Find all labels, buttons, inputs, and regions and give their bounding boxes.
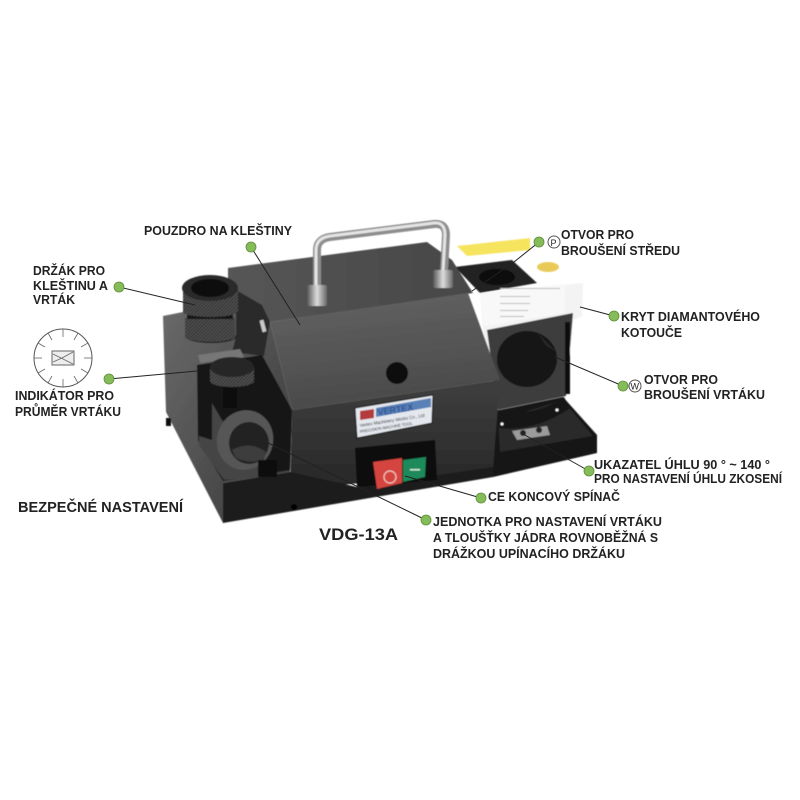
label: collet and drill holder: DRŽÁK PRO <box>33 263 105 278</box>
knob shadow <box>232 290 270 356</box>
label: collet and drill holder: VRTÁK <box>33 292 75 307</box>
leader lines <box>109 242 623 520</box>
left block <box>163 303 292 523</box>
indicator dial <box>34 329 92 387</box>
wheel dial <box>497 331 557 387</box>
label: diameter indicator: INDIKÁTOR PRO <box>15 388 114 403</box>
label: centre hole <box>561 228 680 258</box>
reference sheet <box>480 284 565 326</box>
icon: W marker: W <box>630 382 640 392</box>
label: angle pointer: PRO NASTAVENÍ ÚHLU ZKOSENÍ <box>594 471 782 486</box>
brand plate: PRECISION MACHINE TOOL <box>359 421 414 434</box>
angle pointer plate <box>512 426 550 440</box>
label: drill setting unit: A TLOUŠŤKY JÁDRA ROVNOBĚŽNÁ S <box>433 530 658 545</box>
icon: P marker: P <box>550 238 557 248</box>
brand plate: VERTEX <box>377 402 414 417</box>
label: collet and drill holder <box>33 263 108 307</box>
angle scale <box>497 397 570 429</box>
label: angle pointer: UKAZATEL ÚHLU 90 ° ~ 140 ° <box>594 457 770 472</box>
warning label <box>457 238 530 256</box>
right base plate <box>490 397 597 477</box>
centre grinding block <box>455 260 537 293</box>
label: diamond wheel cover <box>621 309 760 340</box>
handle <box>307 223 453 306</box>
label: CE limit switch: CE KONCOVÝ SPÍNAČ <box>488 489 620 504</box>
label: drill setting unit: DRÁŽKOU UPÍNACÍHO DRŽÁKU <box>433 546 625 561</box>
label: diamond wheel cover: KOTOUČE <box>621 325 682 340</box>
cover knob <box>386 362 408 384</box>
switch <box>355 440 437 489</box>
small yellow label <box>537 262 559 272</box>
cover top <box>228 242 473 322</box>
label: collet case: POUZDRO NA KLEŠTINY <box>144 223 293 238</box>
feet and screws <box>166 418 171 426</box>
wheel window <box>487 313 573 410</box>
label: drill setting unit <box>433 514 662 561</box>
wheel guard <box>480 283 583 410</box>
scale plate <box>198 349 244 363</box>
top collet holder knob <box>182 275 238 343</box>
collet block <box>199 403 276 480</box>
indicator slot <box>197 355 292 481</box>
callout dots <box>104 237 628 525</box>
label: drill setting unit: JEDNOTKA PRO NASTAVENÍ VRTÁKU <box>433 514 662 529</box>
label: diamond wheel cover: KRYT DIAMANTOVÉHO <box>621 309 760 324</box>
label: drill grinding hole: BROUŠENÍ VRTÁKU <box>644 387 765 402</box>
label: angle pointer <box>594 457 782 486</box>
label: centre hole: BROUŠENÍ STŘEDU <box>561 243 680 258</box>
cover front <box>270 293 500 410</box>
icon: P marker <box>548 236 560 248</box>
brand plate: Vertex Machinery Works Co., Ltd <box>359 413 426 428</box>
lower front panel <box>290 380 500 490</box>
label: safe setting: BEZPEČNÉ NASTAVENÍ <box>18 498 184 516</box>
label: drill grinding hole: OTVOR PRO <box>644 373 718 387</box>
label: diameter indicator <box>15 388 121 419</box>
brand plate <box>355 395 433 438</box>
label: drill grinding hole <box>644 373 765 402</box>
label: diameter indicator: PRŮMĚR VRTÁKU <box>15 403 121 419</box>
label: collet and drill holder: KLEŠTINU A <box>33 278 108 293</box>
diameter indicator knob <box>210 357 254 408</box>
black front base <box>223 467 493 523</box>
machine: VDG-13A drill grinder <box>163 223 597 523</box>
label: centre hole: OTVOR PRO <box>561 228 634 242</box>
model name: VDG-13A <box>319 525 398 544</box>
drill setting collet <box>208 402 282 478</box>
icon: W marker <box>629 380 641 392</box>
cover latch <box>260 320 266 332</box>
